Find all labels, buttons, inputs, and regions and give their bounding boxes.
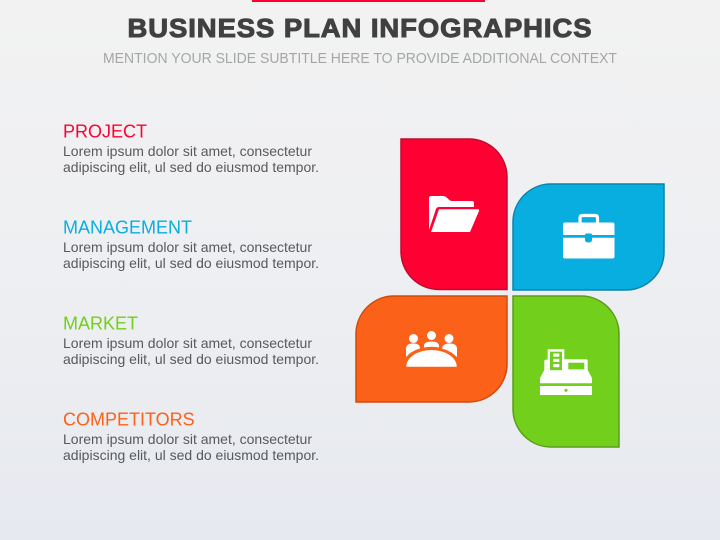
text block: project: [63, 122, 319, 175]
icon: briefcase: [563, 216, 614, 258]
top accent bar: [252, 0, 485, 2]
text block: management: adipiscing elit, ul sed do eiusmod tempor.: [63, 255, 319, 271]
text block: competitors: COMPETITORS: [63, 410, 195, 430]
panel: red petal with folder icon: [401, 139, 507, 290]
text block: competitors: [63, 410, 319, 463]
text block: management: MANAGEMENT: [63, 218, 192, 238]
text block: market: adipiscing elit, ul sed do eiusmod tempor.: [63, 351, 319, 367]
text block: market: MARKET: [63, 314, 138, 334]
text block: management: Lorem ipsum dolor sit amet, consectetur: [63, 239, 312, 255]
text block: project: adipiscing elit, ul sed do eiusmod tempor.: [63, 159, 319, 175]
icon: folder: [429, 196, 479, 232]
text block: competitors: adipiscing elit, ul sed do eiusmod tempor.: [63, 447, 319, 463]
icon: people around a table: [406, 331, 457, 367]
panel: blue petal with briefcase icon: [513, 184, 664, 290]
text block: project: Lorem ipsum dolor sit amet, consectetur: [63, 143, 312, 159]
text block: market: Lorem ipsum dolor sit amet, consectetur: [63, 335, 312, 351]
subtitle: MENTION YOUR SLIDE SUBTITLE HERE TO PROVIDE ADDITIONAL CONTEXT: [103, 51, 617, 67]
title: BUSINESS PLAN INFOGRAPHICS: [128, 13, 592, 43]
panel: orange petal with meeting icon: [356, 296, 507, 402]
text block: project: PROJECT: [63, 122, 147, 142]
icon: cash register: [540, 349, 592, 395]
panel: green petal with cash register icon: [513, 296, 619, 447]
text block: competitors: Lorem ipsum dolor sit amet, consectetur: [63, 431, 312, 447]
text block: management: [63, 218, 319, 271]
text block: market: [63, 314, 319, 367]
